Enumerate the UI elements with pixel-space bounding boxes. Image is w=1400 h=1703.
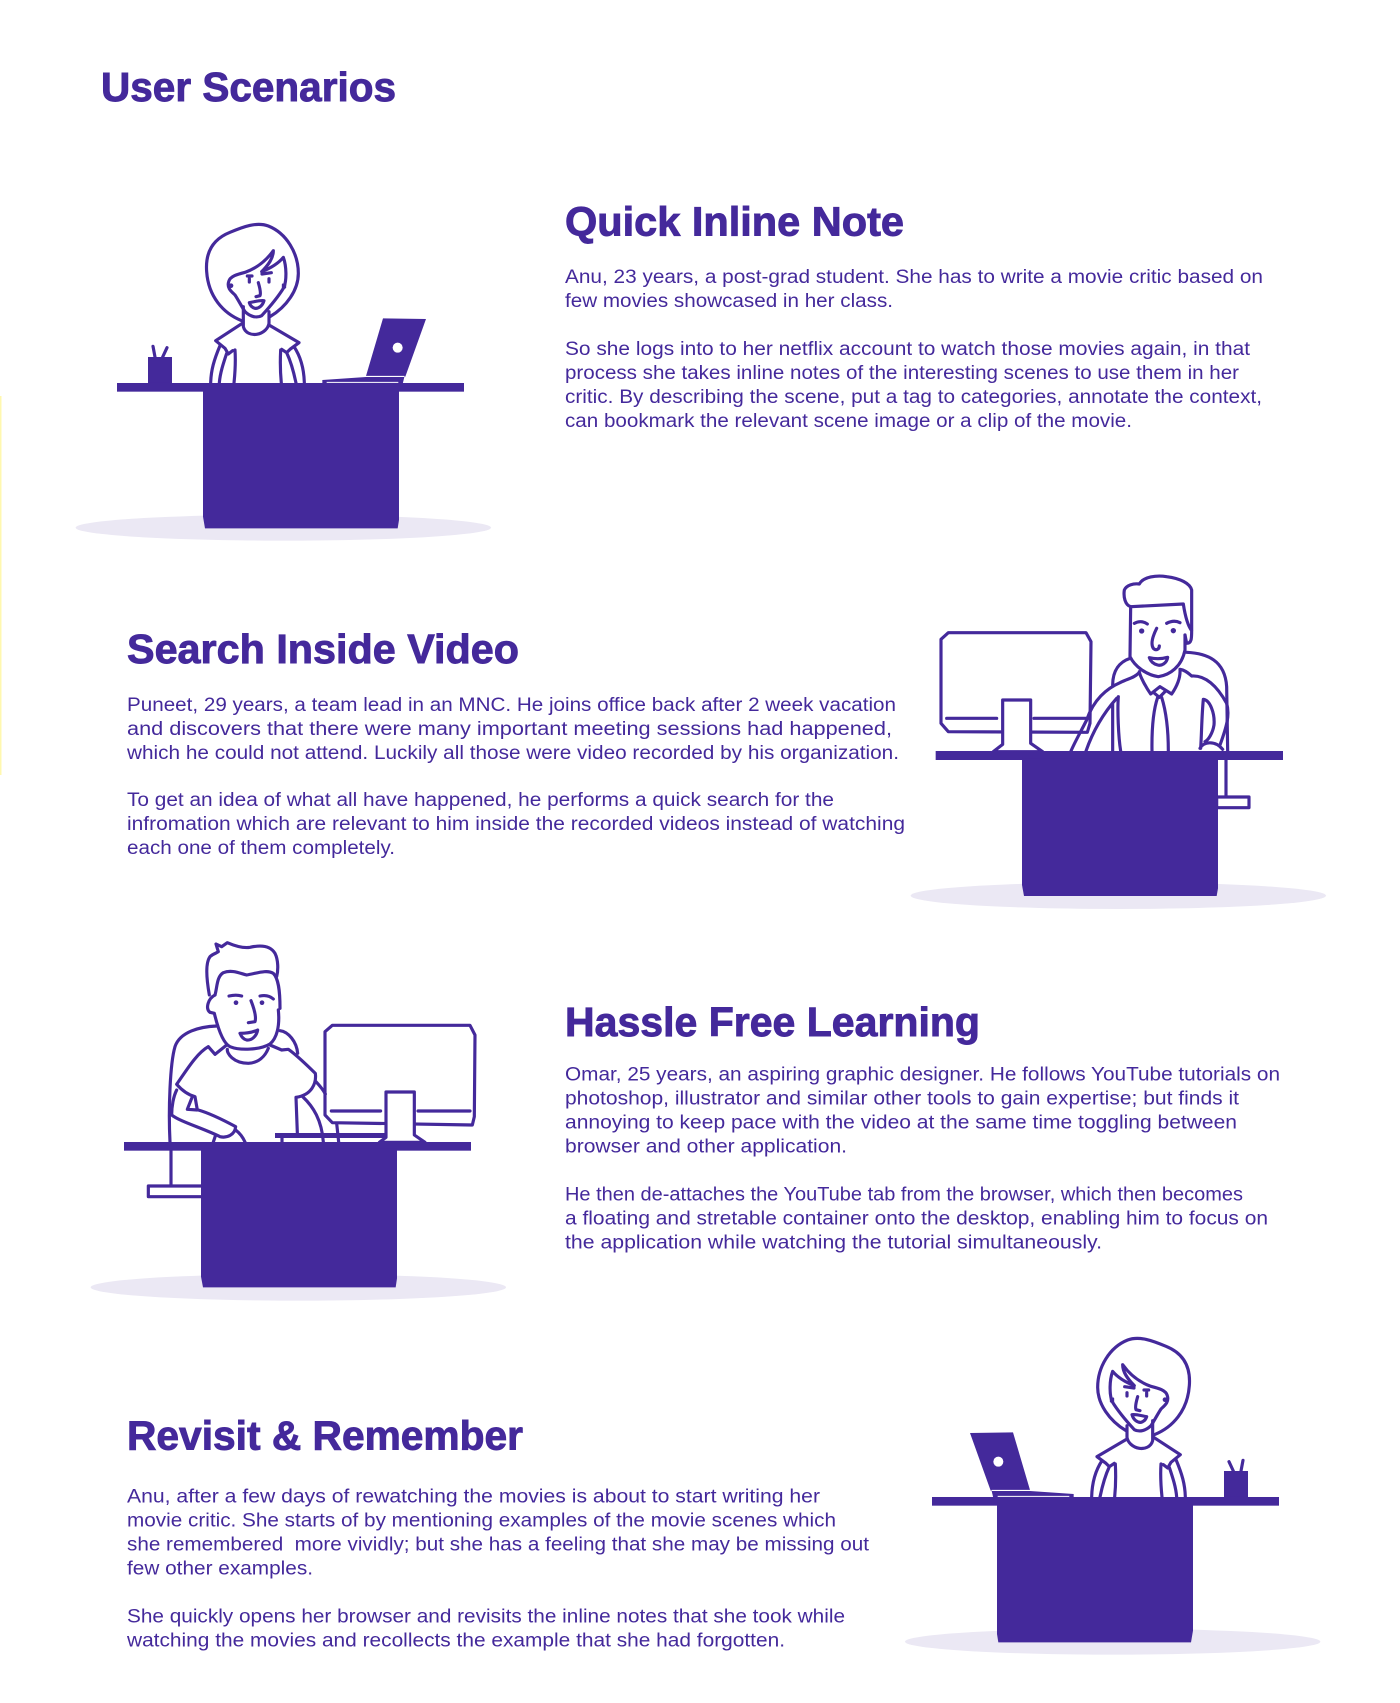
- text block: Search Inside Video: each one of them completely.: [127, 838, 395, 859]
- desk shadow: [905, 1629, 1320, 1655]
- desk: [124, 1142, 471, 1287]
- text block: Revisit & Remember: she remembered more vividly; but she has a feeling that she may be missing out: [127, 1534, 870, 1556]
- text block: Revisit & Remember: Anu, after a few days of rewatching the movies is about to start writing her: [127, 1486, 821, 1508]
- text block: Revisit & Remember: She quickly opens her browser and revisits the inline notes that she took while: [127, 1606, 845, 1628]
- text block: Hassle Free Learning: browser and other application.: [565, 1136, 847, 1158]
- text block: Quick Inline Note: can bookmark the relevant scene image or a clip of the movie.: [565, 411, 1132, 432]
- heading: Search Inside Video: Search Inside Video: [127, 626, 519, 672]
- illustration: woman with laptop at desk, mirrored: [905, 1338, 1320, 1655]
- illustration: woman with laptop at desk: [76, 224, 491, 541]
- hair: [207, 943, 280, 1008]
- heading: Quick Inline Note: Quick Inline Note: [565, 198, 904, 244]
- pen holder: [148, 346, 172, 384]
- monitor: [325, 1025, 475, 1142]
- text block: Revisit & Remember: movie critic. She starts of by mentioning examples of the movie scenes which: [127, 1510, 836, 1532]
- desk shadow: [911, 882, 1326, 909]
- t-shirt and arms: [172, 1045, 339, 1142]
- desk: [932, 1497, 1279, 1642]
- pen holder: [1224, 1460, 1248, 1498]
- text block: Quick Inline Note: critic. By describing the scene, put a tag to categories, annotate the context,: [565, 387, 1262, 408]
- text block: Search Inside Video: and discovers that there were many important meeting sessions had happened,: [127, 719, 892, 740]
- torso and arms: [1092, 1421, 1185, 1497]
- face: [228, 251, 286, 317]
- chair: [148, 1026, 298, 1197]
- illustration: man in tie with monitor at desk: [911, 576, 1326, 909]
- text block: Quick Inline Note: few movies showcased in her class.: [565, 291, 893, 312]
- text block: Hassle Free Learning: photoshop, illustrator and similar other tools to gain expertise; but finds it: [565, 1088, 1240, 1110]
- facial features: [1111, 1387, 1167, 1422]
- desk: [936, 751, 1283, 896]
- text block: Revisit & Remember: [126, 1486, 870, 1652]
- hair: [1098, 1338, 1190, 1435]
- hair: [1124, 576, 1192, 643]
- text block: Hassle Free Learning: annoying to keep pace with the video at the same time toggling between: [565, 1112, 1237, 1134]
- laptop: [970, 1432, 1074, 1498]
- text block: Hassle Free Learning: Omar, 25 years, an aspiring graphic designer. He follows YouTube tutorials on: [565, 1064, 1280, 1086]
- text block: Quick Inline Note: Anu, 23 years, a post-grad student. She has to write a movie critic based on: [565, 267, 1263, 288]
- heading: Revisit & Remember: Revisit & Remember: [127, 1412, 523, 1458]
- title: User Scenarios: [101, 64, 396, 110]
- face: [1110, 1365, 1168, 1431]
- text block: Hassle Free Learning: [565, 1064, 1280, 1254]
- text block: Hassle Free Learning: the application while watching the tutorial simultaneously.: [565, 1232, 1102, 1254]
- text block: Revisit & Remember: watching the movies and recollects the example that she had forgotten.: [126, 1630, 785, 1652]
- keyboard: [275, 1133, 387, 1142]
- text block: Hassle Free Learning: He then de-attaches the YouTube tab from the browser, which then becomes: [565, 1184, 1243, 1206]
- text block: Quick Inline Note: [565, 267, 1263, 432]
- desk shadow: [76, 515, 491, 541]
- desk: [117, 383, 464, 528]
- text block: Quick Inline Note: process she takes inline notes of the interesting scenes to use them in her: [565, 363, 1240, 384]
- text block: Quick Inline Note: So she logs into to her netflix account to watch those movies again, in that: [565, 339, 1251, 360]
- torso and arms: [211, 307, 304, 383]
- text block: Revisit & Remember: few other examples.: [127, 1558, 313, 1580]
- illustration: man in t-shirt with monitor at desk: [91, 943, 506, 1301]
- heading: Hassle Free Learning: Hassle Free Learning: [565, 999, 980, 1045]
- face: [1130, 607, 1185, 677]
- monitor: [941, 633, 1091, 752]
- text block: Search Inside Video: Puneet, 29 years, a team lead in an MNC. He joins office back after 2 week vacation: [127, 695, 896, 716]
- laptop: [322, 318, 426, 384]
- desk shadow: [91, 1274, 506, 1301]
- hair: [206, 224, 298, 321]
- text block: Search Inside Video: which he could not attend. Luckily all those were video recorded by his organization.: [126, 743, 899, 764]
- text block: Search Inside Video: To get an idea of what all have happened, he performs a quick search for the: [127, 790, 834, 811]
- text block: Search Inside Video: [126, 695, 905, 859]
- text block: Hassle Free Learning: a floating and stretable container onto the desktop, enabling him to focus on: [565, 1208, 1268, 1230]
- face: [208, 995, 279, 1049]
- chair: [1113, 652, 1249, 808]
- text block: Search Inside Video: infromation which are relevant to him inside the recorded videos instead of watching: [127, 814, 905, 835]
- facial features: [229, 273, 285, 308]
- shirt and tie: [1071, 669, 1228, 751]
